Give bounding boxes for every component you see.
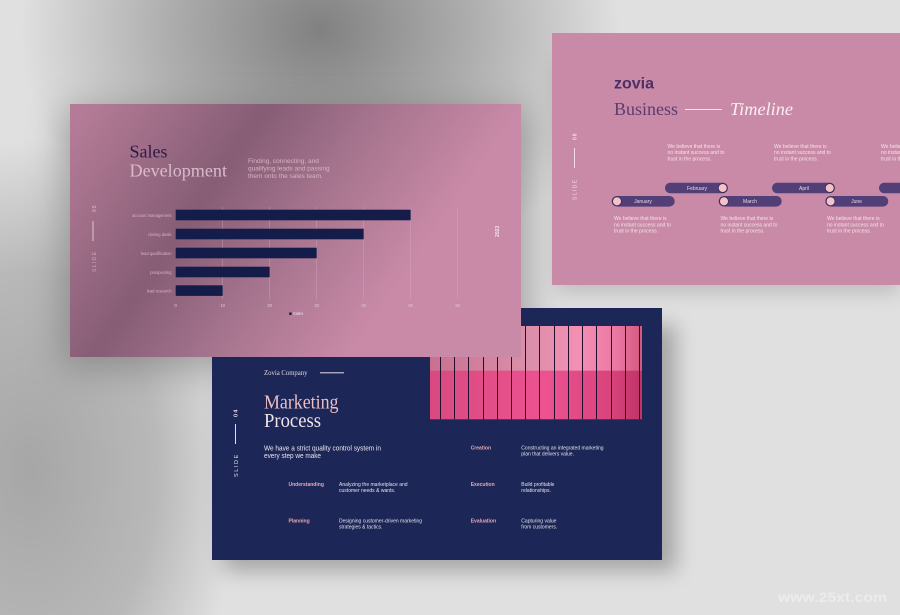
- timeline descriptions: We believe that there is: [720, 216, 774, 222]
- process list: relationships.: [521, 488, 551, 494]
- heading: Business Timeline: [614, 99, 793, 119]
- timeline descriptions: We belie: [881, 144, 900, 150]
- timeline descriptions: no instant success and to: [614, 222, 671, 228]
- slide label: SLIDE: [572, 179, 578, 200]
- process list: Execution: [471, 482, 495, 488]
- heading: Marketing Process: Process: [264, 410, 321, 432]
- timeline pills: March: [743, 199, 757, 205]
- process list: Planning: [288, 518, 310, 524]
- bar chart: lead qualification: [141, 251, 172, 256]
- timeline descriptions: trust in the process.: [614, 229, 658, 235]
- intro text: [264, 446, 381, 460]
- process list: plan that delivers value.: [521, 452, 574, 458]
- timeline pills: [612, 183, 900, 207]
- process list: Build profitable: [521, 482, 555, 488]
- heading: Marketing Process: [264, 392, 338, 432]
- timeline pills: January: [634, 199, 652, 205]
- panel: marketing process: [212, 308, 662, 560]
- company label: [264, 369, 344, 377]
- heading: Sales Development: Development: [130, 160, 227, 180]
- bar chart: 50: [408, 303, 414, 308]
- slide label: [92, 204, 98, 272]
- process list: Capturing value: [521, 518, 557, 524]
- watermark: www.25xt.com: [777, 590, 887, 605]
- year label: 2023: [495, 226, 501, 237]
- timeline descriptions: trust in the process.: [668, 156, 712, 162]
- timeline descriptions: We believe that there is: [668, 144, 721, 150]
- bar chart: 10: [220, 303, 226, 308]
- slide label: 08: [572, 132, 578, 140]
- slide label: [234, 408, 240, 477]
- process list: Evaluation: [471, 518, 496, 524]
- heading: Sales Development: Sales: [130, 142, 168, 162]
- intro text: We have a strict quality control system in: [264, 446, 381, 452]
- image: pink striped columns: [430, 326, 642, 419]
- bar chart: [132, 207, 461, 316]
- process list: [288, 446, 604, 530]
- heading: Business Timeline: Timeline: [730, 99, 793, 119]
- legend: Sales: [293, 311, 303, 316]
- bar chart: lead research: [147, 289, 172, 294]
- slide label: SLIDE: [92, 251, 98, 272]
- logo: zovia: zovia: [614, 76, 654, 92]
- description: them onto the sales team.: [248, 173, 323, 180]
- bar chart: 40: [361, 303, 367, 308]
- description: [248, 158, 330, 180]
- panel: business timeline: [552, 33, 900, 285]
- heading: Sales Development: [130, 142, 227, 180]
- slide label: [572, 132, 578, 200]
- slide label: SLIDE: [234, 453, 240, 477]
- timeline descriptions: trust in the process.: [827, 229, 871, 235]
- bar chart: 60: [455, 303, 461, 308]
- company label: Zovia Company: [264, 369, 308, 377]
- timeline pills: February: [687, 186, 707, 192]
- description: Finding, connecting, and: [248, 158, 319, 165]
- slide label: 05: [92, 204, 98, 212]
- timeline descriptions: trust in the process.: [774, 156, 818, 162]
- process list: Designing customer-driven marketing: [339, 518, 422, 524]
- process list: Creation: [471, 446, 491, 452]
- process list: from customers.: [521, 524, 557, 530]
- process list: customer needs & wants.: [339, 488, 395, 494]
- timeline descriptions: no instant success and to: [720, 222, 778, 228]
- bar chart: closing deals: [148, 232, 172, 237]
- bar chart: 20: [267, 303, 273, 308]
- timeline descriptions: We believe that there is: [614, 216, 667, 222]
- process list: Understanding: [288, 482, 324, 488]
- bar chart: prospecting: [150, 270, 172, 275]
- timeline descriptions: trust in the process.: [720, 229, 765, 235]
- timeline descriptions: no instant success and to: [668, 150, 725, 156]
- heading: Business Timeline: Business: [614, 99, 678, 119]
- bar chart: account management: [132, 213, 172, 218]
- timeline descriptions: [614, 144, 900, 235]
- description: qualifying leads and passing: [248, 166, 330, 172]
- timeline descriptions: no instant success and to: [774, 150, 831, 156]
- process list: strategies & tactics.: [339, 524, 382, 530]
- timeline pills: June: [851, 199, 862, 205]
- bar chart: 30: [314, 303, 320, 308]
- heading: Marketing Process: Marketing: [264, 392, 338, 414]
- timeline descriptions: no instant success and to: [827, 222, 884, 228]
- process list: Analyzing the marketplace and: [339, 482, 408, 488]
- timeline descriptions: We believe that there is: [774, 144, 827, 150]
- timeline descriptions: We believe that there is: [827, 216, 880, 222]
- panel: sales development: [70, 104, 521, 357]
- slide label: 04: [234, 408, 240, 417]
- process list: Constructing an integrated marketing: [521, 446, 604, 452]
- bar chart: 0: [175, 303, 178, 308]
- intro text: every step we make: [264, 453, 321, 460]
- timeline pills: April: [799, 186, 809, 192]
